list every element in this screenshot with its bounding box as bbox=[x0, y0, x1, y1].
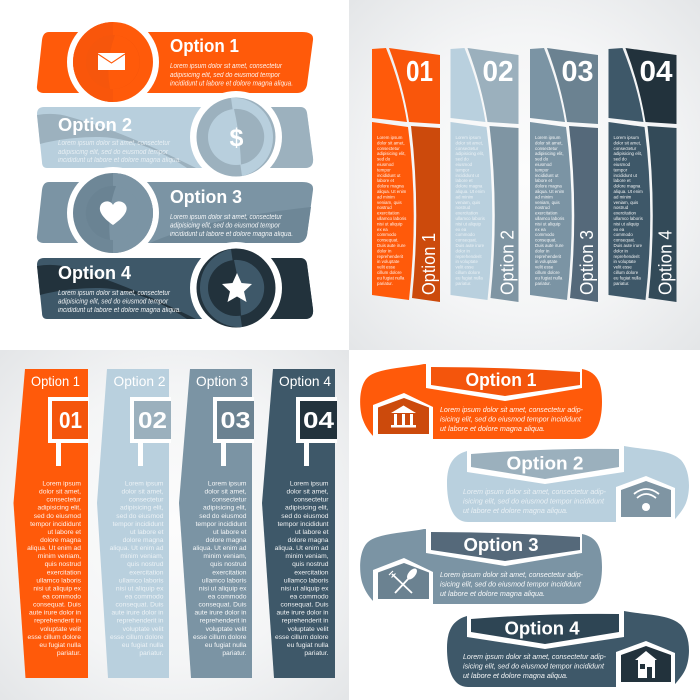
signpost text 3: pariatur. bbox=[222, 650, 247, 657]
signpost text 1: aute irure dolor in bbox=[29, 610, 81, 617]
signpost text 3: voluptate velit bbox=[206, 626, 247, 633]
column 03 text: commodo bbox=[535, 232, 555, 237]
column 02 text: sed do bbox=[456, 157, 469, 162]
signpost column 2 bbox=[97, 369, 171, 678]
number box 04: 04 bbox=[303, 407, 334, 433]
signpost text 4: dolore magna bbox=[288, 537, 329, 544]
signpost text 3: adipisicing elit, bbox=[203, 505, 247, 512]
column 03 text: dolor in bbox=[535, 248, 550, 253]
option 2 blob bbox=[447, 442, 689, 525]
signpost text 1: nisi ut aliquip ex bbox=[33, 585, 82, 592]
signpost column 3 bbox=[179, 369, 254, 678]
column 04 text: ad minim bbox=[614, 194, 632, 199]
signpost text 1: ea commodo bbox=[42, 593, 81, 600]
column 01 text: nisi ut aliquip bbox=[377, 221, 403, 226]
icon: bank bbox=[391, 406, 416, 428]
option 1 description: incididunt ut labore et dolore magna aliqua. bbox=[170, 80, 293, 88]
signpost text 1: minim veniam, bbox=[38, 553, 81, 560]
option 3 copy: isicing elit, sed do eiusmod tempor incididunt bbox=[440, 580, 582, 588]
column 02 text: veniam, quis bbox=[456, 200, 481, 205]
option 4 heading: Option 4 bbox=[58, 263, 131, 283]
signpost text 1: dolore magna bbox=[40, 537, 81, 544]
signpost text 4: aute irure dolor in bbox=[276, 610, 329, 617]
option 4 description: Lorem ipsum dolor sit amet, consectetur bbox=[58, 290, 171, 297]
column 02 text: dolore magna bbox=[456, 184, 483, 189]
column 01 text: exercitation bbox=[377, 211, 400, 216]
option 4 copy bbox=[463, 652, 607, 680]
column 04 text: eu fugiat nulla bbox=[614, 275, 641, 280]
signpost text 2: sed do eiusmod bbox=[116, 513, 164, 520]
signpost text 4: dolor sit amet, bbox=[286, 489, 329, 496]
column 01 text: eu fugiat nulla bbox=[377, 275, 405, 280]
column 02 text: pariatur. bbox=[456, 281, 471, 286]
column 04 text: dolore magna bbox=[614, 184, 641, 189]
signpost text 3: dolor sit amet, bbox=[204, 489, 247, 496]
column 03 text: pariatur. bbox=[535, 281, 551, 286]
column 02 text: Duis aute irure bbox=[456, 243, 485, 248]
column 02 text: eu fugiat nulla bbox=[456, 275, 483, 280]
column 03 bbox=[530, 48, 598, 302]
column 04 text: consequat. bbox=[614, 238, 635, 243]
column 01 text: ad minim bbox=[377, 194, 395, 199]
column 04 text: cillum dolore bbox=[614, 270, 639, 275]
signpost text 4: Lorem ipsum bbox=[290, 480, 329, 488]
column 03 text: dolore magna bbox=[535, 184, 562, 189]
number 01: 01 bbox=[406, 56, 433, 88]
option 4 copy: ut labore et dolore magna aliqua. bbox=[463, 671, 568, 680]
signpost text 4: consequat. Duis bbox=[281, 602, 329, 609]
column 03 text: in voluptate bbox=[535, 259, 558, 264]
icon: heart bbox=[100, 201, 127, 225]
signpost text 1: ut labore et bbox=[48, 529, 81, 536]
column 02 text: reprehenderit bbox=[456, 254, 482, 259]
column 04 text: nisi ut aliquip bbox=[614, 221, 639, 226]
column 02 text: adipisicing elit, bbox=[456, 151, 484, 156]
signpost text 3: sed do eiusmod bbox=[199, 513, 247, 520]
column 04 text: labore et bbox=[614, 178, 631, 183]
panel: horizontal bands with circles bbox=[37, 16, 313, 334]
option 2 description bbox=[58, 140, 181, 164]
signpost text 1: exercitation bbox=[47, 569, 81, 576]
signpost text 2: aliqua. Ut enim ad bbox=[110, 545, 164, 552]
column 01 text: veniam, quis bbox=[377, 200, 402, 205]
signpost text 3: aute irure dolor in bbox=[194, 610, 247, 617]
signpost text 3: ea commodo bbox=[208, 593, 247, 600]
column 02 text: ad minim bbox=[456, 194, 474, 199]
column 04 text: dolor sit amet, bbox=[614, 140, 641, 145]
option 2 description: incididunt ut labore et dolore magna aliqua. bbox=[58, 157, 181, 164]
vertical option label 4: Option 4 bbox=[656, 230, 676, 295]
option 4 band bbox=[37, 242, 313, 334]
signpost text 1: dolor sit amet, bbox=[39, 489, 81, 496]
column 04 text: Duis aute irure bbox=[614, 243, 643, 248]
option 4 title: Option 4 bbox=[504, 618, 580, 638]
column 04 text: reprehenderit bbox=[614, 254, 640, 259]
column 01 text: incididunt ut bbox=[377, 173, 401, 178]
column 01 text: Duis aute irure bbox=[377, 243, 406, 248]
column 04 text: incididunt ut bbox=[614, 173, 638, 178]
signpost text 1: pariatur. bbox=[57, 650, 81, 657]
column 03 text: veniam, quis bbox=[535, 200, 560, 205]
signpost text 3: minim veniam, bbox=[203, 553, 247, 560]
signpost text 3: reprehenderit in bbox=[200, 618, 247, 625]
column 04 text: veniam, quis bbox=[614, 200, 639, 205]
option 4 description: adipisicing elit, sed do eiusmod tempor bbox=[58, 298, 169, 306]
column 03 text: dolor sit amet, bbox=[535, 140, 563, 145]
column 01 text: eiusmod bbox=[377, 162, 394, 167]
column 04 text: pariatur. bbox=[614, 281, 629, 286]
column 02 text: velit esse bbox=[456, 265, 474, 270]
option 2 title: Option 2 bbox=[506, 454, 584, 474]
icon: star bbox=[222, 273, 252, 302]
signpost text 4: exercitation bbox=[294, 569, 329, 576]
number box 02: 02 bbox=[138, 407, 167, 433]
column 02 text: aliqua. Ut enim bbox=[456, 189, 485, 194]
option 3 description: adipisicing elit, sed do eiusmod tempor bbox=[170, 222, 281, 230]
column 02 text: consectetur bbox=[456, 146, 479, 151]
signpost text 1: tempor incididunt bbox=[30, 521, 81, 528]
option 4 copy: Lorem ipsum dolor sit amet, consectetur adip- bbox=[463, 652, 607, 661]
signpost text 3: nisi ut aliquip ex bbox=[199, 585, 247, 592]
column 04 text: aliqua. Ut enim bbox=[614, 189, 643, 194]
column 01 text: adipisicing elit, bbox=[377, 151, 406, 156]
column 03 text: reprehenderit bbox=[535, 254, 562, 259]
column 03 text: ad minim bbox=[535, 194, 553, 199]
signpost text 1: Lorem ipsum bbox=[42, 480, 81, 488]
signpost text 1: aliqua. Ut enim ad bbox=[27, 545, 81, 552]
column 02 text: commodo bbox=[456, 232, 475, 237]
signpost text 2: ullamco laboris bbox=[119, 577, 164, 584]
column 04 text: dolor in bbox=[614, 248, 628, 253]
signpost text 4: aliqua. Ut enim ad bbox=[275, 545, 329, 552]
signpost text 4: ut labore et bbox=[295, 529, 329, 536]
signpost text 1: consectetur bbox=[46, 497, 82, 504]
option 2 copy: Lorem ipsum dolor sit amet, consectetur adip- bbox=[463, 487, 607, 496]
signpost text 1: voluptate velit bbox=[40, 626, 81, 633]
option 3 heading: Option 3 bbox=[170, 187, 242, 207]
column 01 text: aliqua. Ut enim bbox=[377, 189, 407, 194]
signpost text 4: voluptate velit bbox=[288, 626, 329, 633]
signpost text 3: Lorem ipsum bbox=[208, 480, 247, 488]
option 1 title: Option 1 bbox=[466, 370, 536, 390]
vertical option label 1: Option 1 bbox=[419, 233, 439, 295]
option 1 description: adipisicing elit, sed do eiusmod tempor bbox=[170, 72, 281, 79]
option 1 copy: Lorem ipsum dolor sit amet, consectetur adip- bbox=[440, 405, 584, 414]
icon: home bbox=[635, 651, 657, 678]
option 3 copy bbox=[440, 570, 584, 598]
column 02 text: tempor bbox=[456, 167, 470, 172]
column 03 text: nisi ut aliquip bbox=[535, 221, 561, 226]
option 4 description: incididunt ut labore et dolore magna aliqua. bbox=[58, 307, 181, 314]
option label 3: Option 3 bbox=[196, 374, 248, 389]
option label 4: Option 4 bbox=[279, 374, 331, 389]
option 2 copy bbox=[463, 487, 607, 515]
signpost text 4: esse cillum dolore bbox=[275, 634, 329, 641]
column 01 bbox=[372, 48, 440, 302]
option 2 heading: Option 2 bbox=[58, 115, 132, 135]
option 1 copy: isicing elit, sed do eiusmod tempor incididunt bbox=[440, 414, 582, 424]
column 03 text: aliqua. Ut enim bbox=[535, 189, 565, 194]
vertical option label 2: Option 2 bbox=[498, 230, 518, 295]
column 01 text: tempor bbox=[377, 167, 391, 172]
column 02 text: dolor in bbox=[456, 248, 470, 253]
signpost text 2: pariatur. bbox=[139, 650, 164, 657]
icon: envelope bbox=[98, 53, 125, 70]
panel: rounded blobs with banners bbox=[360, 358, 689, 690]
column 03 text: exercitation bbox=[535, 211, 558, 216]
signpost text 2: ea commodo bbox=[125, 593, 164, 600]
column 02 text: eiusmod bbox=[456, 162, 473, 167]
column 03 text: tempor bbox=[535, 167, 549, 172]
signpost text 3: dolore magna bbox=[206, 537, 247, 544]
number box 03: 03 bbox=[220, 407, 250, 433]
column 01 text: consequat. bbox=[377, 238, 398, 243]
signpost text 3: consequat. Duis bbox=[199, 602, 247, 609]
option label 1: Option 1 bbox=[31, 374, 80, 389]
signpost text 2: adipisicing elit, bbox=[120, 505, 164, 512]
number 04: 04 bbox=[640, 56, 672, 88]
column 03 text: ullamco laboris bbox=[535, 216, 565, 221]
column 02 text: consequat. bbox=[456, 238, 477, 243]
number 03: 03 bbox=[562, 56, 594, 88]
signpost text 4: quis nostrud bbox=[292, 561, 329, 568]
signpost text 4: minim veniam, bbox=[285, 553, 329, 560]
signpost text 4: adipisicing elit, bbox=[285, 505, 329, 512]
signpost text 3: tempor incididunt bbox=[196, 521, 247, 528]
column 02 text: cillum dolore bbox=[456, 270, 481, 275]
column 03 text: Lorem ipsum bbox=[535, 135, 561, 140]
column 02 text: ullamco laboris bbox=[456, 216, 486, 221]
option 3 copy: Lorem ipsum dolor sit amet, consectetur adip- bbox=[440, 570, 584, 579]
signpost column 1 bbox=[14, 369, 89, 678]
icon: fork and spoon bbox=[389, 567, 419, 593]
column 03 text: labore et bbox=[535, 178, 553, 183]
column 04 text: consectetur bbox=[614, 146, 637, 151]
column 01 text: Lorem ipsum bbox=[377, 135, 403, 140]
signpost text 3: exercitation bbox=[212, 569, 247, 576]
number box 01 bbox=[48, 397, 89, 466]
signpost text 2: ut labore et bbox=[130, 529, 164, 536]
panel: vertical curved columns bbox=[372, 48, 676, 302]
column 03 text: consequat. bbox=[535, 238, 556, 243]
vertical option label 3: Option 3 bbox=[577, 230, 597, 295]
column 04 text: velit esse bbox=[614, 265, 632, 270]
signpost text 1: eu fugiat nulla bbox=[39, 642, 81, 649]
signpost text 2: consectetur bbox=[129, 497, 164, 504]
signpost text 2: minim veniam, bbox=[120, 553, 164, 560]
signpost text 2: eu fugiat nulla bbox=[122, 642, 164, 649]
column 03 text: sed do bbox=[535, 157, 549, 162]
column 04 text: nostrud bbox=[614, 205, 629, 210]
option 1 description: Lorem ipsum dolor sit amet, consectetur bbox=[170, 63, 283, 70]
column 04 text: sed do bbox=[614, 157, 627, 162]
column 01 text: dolore magna bbox=[377, 184, 404, 189]
column 04 text: ex ea bbox=[614, 227, 625, 232]
option 3 copy: ut labore et dolore magna aliqua. bbox=[440, 589, 545, 598]
column 04 text: eiusmod bbox=[614, 162, 631, 167]
signpost text 2: reprehenderit in bbox=[117, 618, 164, 625]
signpost text 2: dolor sit amet, bbox=[122, 489, 164, 496]
option 2 description: adipisicing elit, sed do eiusmod tempor bbox=[58, 149, 169, 156]
option 3 title: Option 3 bbox=[464, 535, 538, 555]
column 03 text: cillum dolore bbox=[535, 270, 560, 275]
column 02 text: incididunt ut bbox=[456, 173, 480, 178]
column 04 text: exercitation bbox=[614, 211, 637, 216]
option 4 copy: isicing elit, sed do eiusmod tempor incididunt bbox=[463, 662, 605, 670]
option 2 band bbox=[37, 91, 313, 183]
column 02 text: Lorem ipsum bbox=[456, 135, 481, 140]
column 04 text: Lorem ipsum bbox=[614, 135, 639, 140]
column 02 text: labore et bbox=[456, 178, 473, 183]
signpost text 4: ullamco laboris bbox=[284, 577, 329, 584]
signpost text 1: ullamco laboris bbox=[36, 577, 82, 584]
column 01 text: ex ea bbox=[377, 227, 388, 232]
column 01 text: dolor in bbox=[377, 248, 392, 253]
column 04 bbox=[608, 48, 676, 302]
number box 04 bbox=[296, 397, 337, 466]
option 3 band bbox=[37, 167, 313, 259]
signpost text 4: reprehenderit in bbox=[282, 618, 329, 625]
option 3 description bbox=[170, 214, 293, 238]
option 2 copy: ut labore et dolore magna aliqua. bbox=[463, 506, 568, 515]
column 02 text: nostrud bbox=[456, 205, 471, 210]
signpost text 3: aliqua. Ut enim ad bbox=[193, 545, 247, 552]
column 03 text: ex ea bbox=[535, 227, 546, 232]
signpost text 1: adipisicing elit, bbox=[38, 505, 81, 512]
signpost text 2: esse cillum dolore bbox=[110, 634, 164, 641]
column 03 text: nostrud bbox=[535, 205, 550, 210]
signpost text 2: quis nostrud bbox=[127, 561, 164, 568]
panel: signpost columns bbox=[14, 369, 337, 678]
icon: dollar: $ bbox=[230, 124, 244, 152]
signpost text 3: quis nostrud bbox=[210, 561, 247, 568]
signpost text 2: voluptate velit bbox=[123, 626, 164, 633]
column 01 text: reprehenderit bbox=[377, 254, 404, 259]
number box 02 bbox=[130, 397, 171, 466]
signpost text 2: aute irure dolor in bbox=[111, 610, 164, 617]
option 1 band bbox=[37, 16, 313, 108]
option 3 blob bbox=[360, 523, 602, 607]
column 03 text: velit esse bbox=[535, 265, 554, 270]
signpost column 4 bbox=[262, 369, 337, 678]
column 04 text: adipisicing elit, bbox=[614, 151, 642, 156]
icon: wifi bbox=[634, 489, 659, 511]
signpost text 3: consectetur bbox=[212, 497, 247, 504]
column 01 text: labore et bbox=[377, 178, 395, 183]
option 4 blob bbox=[447, 607, 689, 690]
column 01 text: nostrud bbox=[377, 205, 392, 210]
column 02 bbox=[450, 48, 518, 302]
column 04 text: in voluptate bbox=[614, 259, 637, 264]
number box 03 bbox=[213, 397, 254, 466]
column 03 text: eu fugiat nulla bbox=[535, 275, 563, 280]
option label 2: Option 2 bbox=[114, 374, 166, 389]
signpost text 1: reprehenderit in bbox=[34, 618, 81, 625]
column 02 text: ex ea bbox=[456, 227, 467, 232]
column 01 text: pariatur. bbox=[377, 281, 393, 286]
column 03 text: adipisicing elit, bbox=[535, 151, 564, 156]
option 3 description: incididunt ut labore et dolore magna aliqua. bbox=[170, 231, 293, 238]
column 01 text: dolor sit amet, bbox=[377, 140, 405, 145]
column 04 text: tempor bbox=[614, 167, 628, 172]
signpost text 3: esse cillum dolore bbox=[193, 634, 247, 641]
signpost text 4: nisi ut aliquip ex bbox=[281, 585, 329, 592]
column 02 text: exercitation bbox=[456, 211, 479, 216]
column 02 text: nisi ut aliquip bbox=[456, 221, 481, 226]
signpost text 2: dolore magna bbox=[123, 537, 164, 544]
column 04 text: ullamco laboris bbox=[614, 216, 644, 221]
option 3 description: Lorem ipsum dolor sit amet, consectetur bbox=[170, 214, 283, 221]
signpost text 2: exercitation bbox=[129, 569, 164, 576]
column 04 text: commodo bbox=[614, 232, 633, 237]
column 01 text: ullamco laboris bbox=[377, 216, 407, 221]
signpost text 4: eu fugiat nulla bbox=[287, 642, 329, 649]
column 01 text: cillum dolore bbox=[377, 270, 402, 275]
signpost text 2: nisi ut aliquip ex bbox=[116, 585, 164, 592]
column 01 text: velit esse bbox=[377, 265, 396, 270]
signpost text 2: Lorem ipsum bbox=[125, 480, 164, 488]
option 1 copy bbox=[440, 405, 584, 433]
column 02 text: in voluptate bbox=[456, 259, 479, 264]
column 01 text: consectetur bbox=[377, 146, 400, 151]
column 02 text: dolor sit amet, bbox=[456, 140, 483, 145]
signpost text 1: esse cillum dolore bbox=[27, 634, 81, 641]
signpost text 1: consequat. Duis bbox=[33, 602, 82, 609]
number 02: 02 bbox=[482, 56, 514, 88]
column 01 text: sed do bbox=[377, 157, 391, 162]
signpost text 3: ut labore et bbox=[213, 529, 247, 536]
option 1 description bbox=[170, 63, 293, 88]
column 03 text: consectetur bbox=[535, 146, 558, 151]
option 2 copy: isicing elit, sed do eiusmod tempor incididunt bbox=[463, 496, 605, 506]
signpost text 4: consectetur bbox=[294, 497, 329, 504]
option 1 heading: Option 1 bbox=[170, 36, 239, 56]
option 4 description bbox=[58, 290, 181, 314]
signpost text 1: quis nostrud bbox=[45, 561, 81, 568]
column 03 text: eiusmod bbox=[535, 162, 552, 167]
signpost text 2: tempor incididunt bbox=[113, 521, 164, 528]
signpost text 1: sed do eiusmod bbox=[34, 513, 81, 520]
signpost text 3: eu fugiat nulla bbox=[205, 642, 247, 649]
column 03 text: Duis aute irure bbox=[535, 243, 564, 248]
signpost text 4: sed do eiusmod bbox=[281, 513, 329, 520]
column 03 text: incididunt ut bbox=[535, 173, 559, 178]
signpost text 4: ea commodo bbox=[290, 593, 329, 600]
option 2 description: Lorem ipsum dolor sit amet, consectetur bbox=[58, 140, 171, 147]
signpost text 4: pariatur. bbox=[304, 650, 329, 657]
column 01 text: commodo bbox=[377, 232, 397, 237]
column 01 text: in voluptate bbox=[377, 259, 400, 264]
option 1 copy: ut labore et dolore magna aliqua. bbox=[440, 424, 545, 433]
signpost text 3: ullamco laboris bbox=[202, 577, 247, 584]
option 1 blob bbox=[360, 358, 602, 442]
signpost text 4: tempor incididunt bbox=[278, 521, 329, 528]
number box 01: 01 bbox=[59, 407, 82, 433]
signpost text 2: consequat. Duis bbox=[116, 602, 164, 609]
